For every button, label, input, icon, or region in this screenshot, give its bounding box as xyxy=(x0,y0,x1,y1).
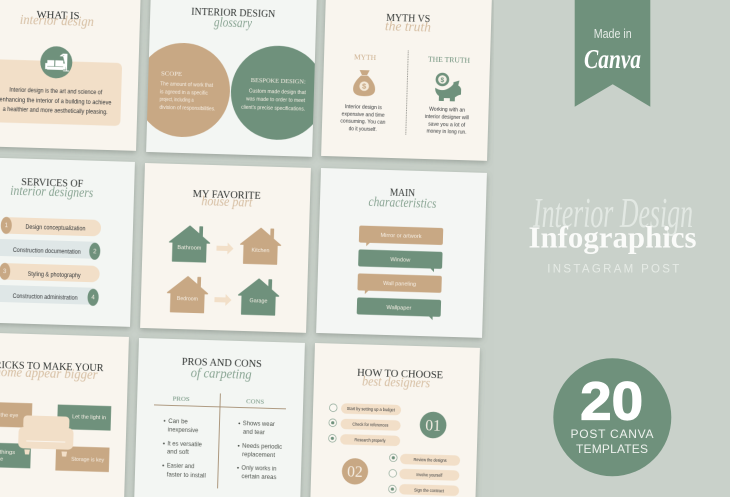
checklist group 1: Check for references xyxy=(352,422,389,428)
definition text: enhancing the interior of a building to achieve xyxy=(0,97,112,107)
tip box: put things in storage xyxy=(0,442,31,468)
heading: main: MAIN xyxy=(390,188,415,199)
panel: what is interior design xyxy=(0,0,141,151)
checklist group 1: Start by setting up a budget xyxy=(347,406,396,413)
service item 2 xyxy=(0,239,101,260)
bubble: window xyxy=(358,249,443,272)
small icons xyxy=(24,449,67,457)
definition text: a healthier and more aesthetically pleasing. xyxy=(3,107,108,116)
script heading: best designers: best designers xyxy=(362,373,430,390)
icon: piggy bank: $ xyxy=(440,77,445,84)
panel: pros and cons of carpeting xyxy=(134,338,305,497)
term: bespoke design: BESPOKE DESIGN: xyxy=(251,78,306,86)
bubble: mirror or artwork: Mirror or artwork xyxy=(380,233,422,240)
house: bathroom xyxy=(169,225,210,262)
title: infographics: Infographics xyxy=(528,219,696,254)
glossary circles xyxy=(147,42,315,140)
label: myth: MYTH xyxy=(354,53,376,62)
heading: services of: SERVICES OF xyxy=(21,177,84,190)
house: kitchen: Kitchen xyxy=(251,247,270,254)
term: scope: division of responsibilities. xyxy=(159,105,215,112)
badge: 20 post canva templates: POST CANVA xyxy=(570,427,654,441)
house: bedroom: Bedroom xyxy=(177,296,198,303)
tip box: let the light in xyxy=(57,405,111,431)
definition panel xyxy=(0,59,122,126)
number badge: 02 xyxy=(342,458,368,485)
script heading: the truth: the truth xyxy=(385,18,431,35)
tip box: let the light in: Let the light in xyxy=(72,414,106,421)
icon: armchair xyxy=(18,415,74,450)
truth text: Working with an xyxy=(429,107,465,114)
number badge: 01: 01 xyxy=(425,417,441,435)
truth text: money in long run. xyxy=(426,129,467,136)
service item 4 xyxy=(0,285,99,306)
panel: services of interior designers xyxy=(0,157,135,327)
myth text: do it yourself. xyxy=(349,126,377,133)
bubble: wall paneling: Wall paneling xyxy=(383,281,416,288)
badge: 20 post canva templates: TEMPLATES xyxy=(576,442,648,456)
cons list: replacement xyxy=(242,451,275,459)
script heading: characteristics: characteristics xyxy=(368,194,437,211)
checklist group 2: Sign the contract xyxy=(414,487,445,493)
bubble: wallpaper xyxy=(357,297,441,320)
service item 3 xyxy=(0,263,100,283)
panel: main characteristics xyxy=(316,168,487,338)
checklist group 2 xyxy=(388,453,460,496)
ribbon: made in canva: Canva xyxy=(584,44,641,74)
heading: myth vs: MYTH VS xyxy=(386,13,430,25)
house: garage xyxy=(238,278,279,315)
truth text xyxy=(424,107,469,136)
table header: pros: PROS xyxy=(173,395,190,403)
checklist group 2: Review the designs xyxy=(414,457,447,463)
house: bedroom xyxy=(167,276,208,313)
pros list: and soft xyxy=(167,448,189,456)
service item 1: 1 xyxy=(4,223,9,229)
table lines xyxy=(152,391,286,490)
script heading: interior designers: interior designers xyxy=(10,183,94,200)
table header: cons: CONS xyxy=(246,398,265,406)
myth text: expensive and time xyxy=(342,111,385,119)
pros list: Easier and xyxy=(167,462,195,470)
heading: what is: WHAT IS xyxy=(36,10,80,22)
script heading: glossary: glossary xyxy=(214,14,252,31)
service item 4: 4 xyxy=(91,295,95,301)
truth text: interior designer will xyxy=(425,114,469,121)
term: scope: SCOPE xyxy=(161,71,182,78)
badge: 20 post canva templates: 20 xyxy=(580,372,643,432)
checklist group 2: Involve yourself xyxy=(416,472,443,478)
number badge: 01 xyxy=(419,411,447,439)
checklist group 1 xyxy=(328,403,401,446)
service item 3: Styling & photography xyxy=(28,272,81,279)
heading: interior design: INTERIOR DESIGN xyxy=(191,7,275,20)
myth text: consuming. You can xyxy=(340,119,385,126)
service item 1 xyxy=(1,217,101,237)
arrow: bedroom to garage xyxy=(214,294,232,306)
panel: glossary xyxy=(134,0,328,157)
subtitle: instagram post: INSTAGRAM POST xyxy=(547,264,679,276)
divider xyxy=(406,50,408,135)
myth text xyxy=(340,104,386,133)
panel: my favorite house part xyxy=(140,163,311,333)
badge: 20 post canva templates xyxy=(553,358,671,476)
myth text: Interior design is xyxy=(345,104,382,111)
term: bespoke design xyxy=(241,78,307,113)
service item 2: 2 xyxy=(93,249,97,255)
term: scope xyxy=(159,71,216,112)
pros list: Can be xyxy=(168,418,188,425)
bubble: wall paneling xyxy=(357,273,442,296)
bubble: mirror or artwork xyxy=(359,226,443,249)
icon: money bag: $ xyxy=(362,82,367,91)
service item 2: Construction documentation xyxy=(13,248,81,256)
definition text: Interior design is the art and science of xyxy=(9,88,103,96)
definition text xyxy=(0,87,112,116)
cons list: Only works in xyxy=(241,465,277,473)
service item 3: 3 xyxy=(3,269,7,275)
house: garage: Garage xyxy=(249,298,268,305)
cons list: certain areas xyxy=(241,473,277,481)
term: bespoke design: Custom made design that xyxy=(249,89,307,96)
house: bathroom: Bathroom xyxy=(177,245,202,252)
ribbon: made in canva: Made in xyxy=(594,27,632,41)
panel: how to choose best designers xyxy=(310,343,480,497)
pros list: inexpensive xyxy=(168,426,199,434)
heading: how to choose: HOW TO CHOOSE xyxy=(357,368,443,381)
cons list xyxy=(237,420,283,481)
tip box: storage is key: Storage is key xyxy=(71,457,104,464)
arrow: bathroom to kitchen xyxy=(216,242,234,255)
cons list: Needs periodic xyxy=(242,443,283,451)
term: scope: is agreed in a specific xyxy=(160,89,208,97)
term: scope: project, including a xyxy=(160,97,194,104)
icon: sofa and lamp xyxy=(40,46,73,79)
ribbon: made in canva xyxy=(575,0,650,107)
icon: piggy bank xyxy=(435,72,462,102)
tip box: storage is key xyxy=(55,446,110,472)
service item 1: Design conceptualization xyxy=(25,225,85,232)
term: bespoke design: was made to order to meet xyxy=(246,96,306,104)
number badge: 02: 02 xyxy=(347,464,363,481)
heading: my favorite: MY FAVORITE xyxy=(193,189,261,202)
term: bespoke design: client's precise specifications. xyxy=(241,105,305,113)
cons list: and tear xyxy=(243,429,266,436)
term: scope: The amount of work that xyxy=(160,82,214,89)
pros list xyxy=(162,418,208,480)
panel: tricks to make your home appear bigger xyxy=(0,332,129,497)
truth text: save you a lot of xyxy=(428,121,466,129)
icon: money bag xyxy=(353,70,376,96)
service item 4: Construction administration xyxy=(12,294,78,302)
script heading: interior design: interior design xyxy=(20,12,94,29)
pros list: faster to install xyxy=(167,471,206,480)
pros list: It es versatile xyxy=(167,440,202,448)
label: the truth: THE TRUTH xyxy=(428,56,470,65)
tip box: trick the eye xyxy=(0,402,32,428)
cons list: Shows wear xyxy=(243,420,276,428)
script heading: house part: house part xyxy=(201,193,254,210)
bubble: wallpaper: Wallpaper xyxy=(386,305,412,312)
checklist group 1: Research properly xyxy=(354,437,386,443)
script heading: of carpeting: of carpeting xyxy=(190,365,252,382)
right column background xyxy=(494,0,730,497)
heading: pros and cons: PROS AND CONS xyxy=(182,357,262,370)
bubble: window: Window xyxy=(390,257,411,264)
panel: myth vs the truth xyxy=(321,0,492,161)
house: kitchen xyxy=(240,228,281,264)
